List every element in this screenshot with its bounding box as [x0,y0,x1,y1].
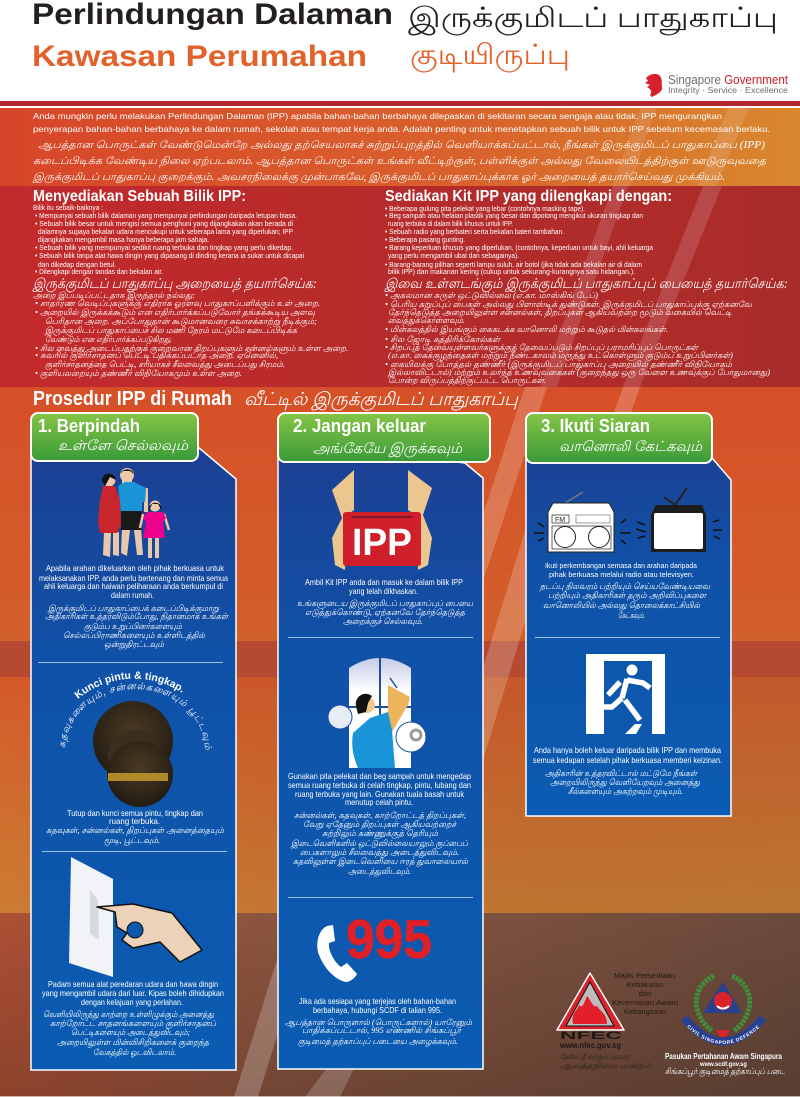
text block: step 2 call: குடிமைத் தற்காப்புப் படையை அழைக்கவும். [298,1037,458,1047]
number 995: 995 [346,908,432,970]
text block: step 1 ventilation [42,979,224,1058]
text block: step 2 call: berbahaya, hubungi SCDF di talian 995. [313,1005,442,1015]
step 2 header tab: 2. Jangan keluar [293,416,426,436]
logo: NFEC [557,973,651,1071]
text block: SCDF name: சிங்கப்பூர் குடிமைத் தற்காப்புப் படை [665,1067,785,1077]
text block: kit list tamil: • மின்கலத்தில் இயங்கும் கைகடக்க வானொலி மற்றும் கூடுதல் மின்கலங்கள். [385,325,668,335]
text block: step 2 call [285,996,472,1047]
text block: room list malay: dan dikedap dengan betul. [38,260,116,269]
text block: room list malay: • Sebuah bilik tanpa alat hawa dingin yang dipasang di dinding kerana ia sukar untuk dicapai [35,251,304,260]
intro text block: ஆபத்தான பொருட்கள் வேண்டுமென்றே அல்லது தற்செயலாகச் சுற்றுப்புறத்தில் வெளியாக்கப்பட்டால், நீங்கள் இருக்குமிடப் பாதுகாப்பை (IPP) [38,139,766,152]
title: குடியிருப்பு [410,40,570,73]
text block: kit list malay: • Barang-barang pilihan seperti lampu suluh, air botol (jika tidak ada bekalan air di dalam [385,260,642,269]
icon: family [98,468,169,558]
icon: IPP kit [332,470,432,570]
text block: step 2 seal: சுற்றிலும் கண்ணுக்குத் தெரியும் [322,829,438,839]
step 2 header tab [278,413,490,462]
text block: kit list tamil: வைத்துக்கொள்ளவும். [388,316,465,326]
text block: step 2 call: ஆபத்தான பொருளால் (பொருட்களால்) யாரேனும் [285,1018,472,1028]
icon: hand pressing switch [69,857,202,977]
text block: step 1 ventilation: dengan kelajuan yang perlahan. [81,997,183,1007]
text block: step 2 seal: semua ruang terbuka di celah tingkap, pintu, lubang dan [288,780,471,790]
step 3 header tab [526,413,712,463]
step 1 header tab: 1. Berpindah [38,416,140,436]
title [32,0,778,73]
intro text block: இருக்குமிடப் பாதுகாப்பு குறைக்கும். அவசரநிலைக்கு முன்பாகவே, இருக்குமிடப் பாதுகாப்புக்காக ஓர் அறையைத் தயார்செய்வது முக்கியம். [32,172,725,184]
text block: step 1 lock: மூடி, பூட்டவும். [104,836,160,846]
text block: room list tamil [33,291,348,379]
intro text block: penyerapan bahan-bahan berbahaya ke dalam rumah, sekolah atau tempat kerja anda. Adalah penting untuk menetapkan sebuah bilik untuk IPP sebelum kecemasan berlaku. [33,124,770,134]
text block: NFEC name: Majlis Persediaan [614,971,675,980]
text block: step 2 call: Jika ada sesiapa yang terjejas oleh bahan-bahan [299,996,456,1006]
logo: NFEC: NFEC [560,1030,622,1042]
text block: step 2 seal: சன்னல்கள், கதவுகள், காற்றோட்டத் திறப்புகள், [294,811,466,821]
text block: step 3 exit: அறையிலிருந்து வெளியேறவும் அனைத்து [550,778,701,788]
text block: kit list malay: • Sebuah radio yang berbateri serta bekalan bateri tambahan. [385,227,564,236]
text block: step 1 ventilation: yang mengambil udara dari luar. Kipas boleh dihidupkan [42,988,224,998]
text block: step 1 ventilation: வெளியிலிருந்து காற்றை உள்ளிழுக்கும் அனைத்து [43,1010,215,1020]
text block: step 1 move indoors [39,563,229,650]
text block: kit list malay: • Beg sampah atau helaian plastik yang besar dan dipotong mengikut ukuran tingkap dan [385,211,643,220]
text block: step 3 follow: வானொலியில் அல்லது தொலைக்காட்சியில் [543,601,701,611]
logo: SCDF: CIVIL SINGAPORE DEFENCE [688,1025,760,1044]
heading: procedure: Prosedur IPP di Rumah [33,388,232,410]
step 3 header tab: 3. Ikuti Siaran [541,416,650,436]
text block: step 1 move indoors: Apabila arahan dikeluarkan oleh pihak berkuasa untuk [46,563,225,573]
text block: kit list tamil: • பெரிய கறுப்புப் பைகள் அல்லது பிளாஸ்டிக் துண்டுகள். இருக்குமிடப் பாதுகாப்புக்கு ஏற்கனவே [385,300,753,310]
text block: step 3 follow: Ikuti perkembangan semasa dan arahan daripada [545,561,698,570]
text block: kit list tamil: இல்லாவிட்டால்) மற்றும் உலர்ந்த உணவுவகைகள் (குறைந்தது ஒரு வேளை உணவுக்குப் போதுமானது) [387,368,770,378]
text block: NFEC name: dan [639,989,651,998]
step 1 header tab: உள்ளே செல்லவும் [58,438,189,454]
text block: step 1 lock: ruang terbuka. [109,816,160,826]
Singapore Government logo: Integrity · Service · Excellence [668,86,789,95]
text block: room list malay: • Sebuah bilik yang mempunyai sedikit ruang terbuka dan tingkap yang perlu dikedap. [35,243,293,252]
heading: room tamil: இருக்குமிடப் பாதுகாப்பு அறையைத் தயார்செய்க: [32,276,317,293]
Singapore Government logo [645,73,789,97]
text block: kit list tamil: • சில ஜோடி கத்திரிக்கோல்கள் [385,335,502,345]
text block: step 2 call: பாதிக்கப்பட்டால், 995 எண்ணில் சிங்கப்பூர் [302,1026,463,1036]
father [118,468,148,556]
text block: room list tamil: இருக்குமிடப் பாதுகாப்பைச் சில மணி நேரம் மட்டுமே கடைப்பிடிக்க [44,326,298,336]
intro text block: Anda mungkin perlu melakukan Perlindungan Dalaman (IPP) apabila bahan-bahan berbahaya dilepaskan di sekitaran secara sengaja atau tidak. IPP mengurangkan [33,111,722,121]
heading: kit: Sediakan Kit IPP yang dilengkapi dengan: [385,188,672,205]
text block: kit list tamil: • கையிலக்கு போத்தல் தண்ணீர் (இருக்குமிடப் பாதுகாப்பு அறையில் தண்ணீர் விநியோகம் [385,360,732,370]
icon: radio: FM [555,517,565,524]
text block: step 3 exit: semua kedapan setelah pihak berkuasa memberi keizinan. [533,755,722,765]
text block: room list malay [33,203,304,276]
text block: NFEC name [612,971,678,1016]
text block: room list tamil: • அறையில் இருக்கக்கூடும் என எதிர்பார்க்கப்படுவோர் தங்கக்கூடிய அளவு [35,308,316,318]
text block: step 1 move indoors: செல்லப்பிராணிகளையும் உள்ளிடத்தில் [63,631,206,641]
icon: taping window [328,656,426,768]
text block: room list malay: • Mempunyai sebuah bilik dalaman yang mempunyai perlindungan daripada letupan biasa. [35,211,297,220]
text block: step 1 move indoors: ஒன்றுதிரட்டவும் [104,640,164,650]
text block: room list tamil: • குளியலறையும் தண்ணீர் விநியோகமும் உள்ள அறை. [35,369,242,379]
text block: kit list tamil: • அகலமான சுருள் ஒட்டுவில்லை (எ.கா. மாஸ்கிங் டேப்) [385,291,598,301]
text block: kit list malay [385,204,654,276]
text block: step 3 follow: பற்றியும் அதிகாரிகள் தரும் அறிவிப்புகளை [548,591,707,601]
mother [98,473,121,557]
text block: room list tamil: வேண்டும் என எதிர்பார்க்கப்படுகிறது. [45,335,172,345]
text block: kit list malay: ruang terbuka di dalam bilik khusus untuk IPP. [388,219,513,228]
text block: step 1 ventilation: பெட்டிகளையும் அடைத்துவிடவும்; [71,1028,190,1038]
text block: step 3 follow: கேட்கவும். [618,611,645,620]
text block: step 3 follow: pihak berkuasa melalui radio atau televisyen. [549,570,694,579]
text block: kit list tamil: தேர்ந்தெடுத்த அறையிலுள்ள சன்னல்கள், திறப்புகள் ஆகியவற்றை மூடும் வகையில் வெட்டி [388,308,732,318]
icon: telephone [317,925,357,982]
text block: step 1 move indoors: அதிகாரிகள் உத்தரவிடும்போது, நிதானமாக உங்கள் [45,612,229,622]
text block: step 2 seal [288,771,471,877]
intro text block: கடைப்பிடிக்க வேண்டிய நிலை ஏற்படலாம். ஆபத்தான பொருட்கள் உங்கள் வீட்டிற்குள், பள்ளிக்குள் அல்லது வேலையிடத்திற்குள் ஊடுருவுவதை [33,155,767,168]
text block: step 2 kit: அறைக்குச் செல்லவும். [343,617,423,627]
text block: kit list tamil: (எ.கா. கைக்குழந்தைகள் மற்றும் நீண்டகாலம் மருந்து உட்கொள்ளும் குடும்ப உறுப்பினர்கள்) [388,351,733,361]
panel: step 3 [526,413,731,816]
text block: step 2 seal: பைகளாலும் சீலவைத்து அடைத்துவிடவும். [300,848,459,858]
heading: procedure [33,388,519,411]
heading: kit tamil: இவை உள்ளடங்கும் இருக்குமிடப் பாதுகாப்புப் பையைத் தயார்செய்க: [384,276,788,293]
text block: step 1 move indoors: இருக்குமிடப் பாதுகாப்பைக் கடைப்பிடிக்குமாறு [47,604,220,614]
text block: step 1 move indoors: dalam rumah. [111,590,154,600]
panel: preparation [0,186,800,387]
text block: room list malay: • Sebuah bilik besar untuk mengisi semua penghuni yang dijangkakan akan berada di [35,219,293,228]
text block: step 1 ventilation: வேகத்தில் ஓடவிடலாம். [93,1048,176,1058]
intro text block [32,111,770,184]
text block: step 2 seal: Gunakan pita pelekat dan beg sampah untuk mengedap [288,771,471,781]
text block: step 2 seal: ruang terbuka yang lain. Gunakan tuala basah untuk [295,789,465,799]
text block: step 2 seal: கதவிலுள்ள இடைவெளியை ஈரத் துவாலையால் [293,857,469,867]
text block: room list tamil: குளிர்சாதனத்தை பெட்டி, சரியாகச் சீலவைத்து அடைப்பது சிரமம். [45,360,285,370]
text block: SCDF name [665,1052,785,1077]
text block: step 3 exit: சீல்களையும் அகற்றவும் முடியும். [568,787,683,797]
text block: step 3 follow: நடப்பு நிலவரம் பற்றியும் செய்யவேண்டியவை [539,582,711,592]
logo: NFEC: தேசிய தீ மற்றும் அவசர [560,1053,631,1062]
text block: step 3 exit: அதிகாரின் உத்தரவிட்டால் மட்டுமே நீங்கள் [545,769,698,779]
text block: step 2 kit: Ambil Kit IPP anda dan masuk ke dalam bilik IPP [305,577,463,587]
step 1 header tab [31,413,198,461]
text block: kit list malay: • Beberapa pasang gunting. [385,235,465,244]
title: Kawasan Perumahan [32,40,367,73]
heading: room: Menyediakan Sebuah Bilik IPP: [33,188,246,205]
logo: NFEC: ஆயத்தநிலை மன்றம் [560,1062,651,1071]
text block: room list tamil: அறை இப்படிப்பட்டதாக இருந்தால் நல்லது: [33,291,195,301]
girl [140,500,169,558]
text block: room list tamil: பெரிதான அறை. அப்போதுதான் கூடுமானவரை சுவாசக்காற்று நீடிக்கும்; [45,317,317,327]
icon: merlion [645,74,662,97]
text block: step 1 lock [46,808,224,846]
text block: step 1 ventilation: அறையிலுள்ள மின்விசிறிகளைக் குறைந்த [57,1038,210,1048]
text block: room list tamil: • சில வைத்து அடைப்பதற்குக் குறைவான திறப்புகளும் சன்னல்களும் உள்ள அறை. [35,344,348,354]
icon: television [636,488,722,552]
text block: step 2 kit [297,577,474,627]
text block: kit list malay: • Beberapa gulung pita pelekat yang lebar (contohnya masking tape). [385,204,585,213]
text block: kit list tamil: போன்ற விருப்பத்திற்குட்பட்ட பொருட்கள். [388,376,546,386]
panel: step 1 [30,412,237,1071]
text block: step 2 seal: அடைத்துவிடவும். [348,867,411,877]
text block: step 3 follow [539,561,711,620]
heading: procedure: வீட்டில் இருக்குமிடப் பாதுகாப்பு [244,389,519,411]
text block: room list tamil: • சாதாரண வெடிப்புகளுக்கு எதிராக ஓரளவு பாதுகாப்பளிக்கும் உள் அறை. [35,299,320,309]
text block: step 2 kit: yang telah dikhaskan. [349,586,418,596]
text block: step 1 move indoors: melaksanakan IPP, anda perlu bertenang dan minta semua [39,573,228,583]
text block: kit list malay: bilik IPP) dan makanan kering (cukup untuk sekurang-kurangnya satu hidangan.). [388,267,635,276]
text block: room list tamil: • சுவரில் குளிர்சாதனப் பெட்டி பதிக்கப்படாத அறை. ஏனெனில், [35,351,278,361]
panel: step 2 [278,413,490,1069]
icon: radio [534,492,631,552]
text block: step 1 lock: Tutup dan kunci semua pintu, tingkap dan [67,808,203,818]
text block: step 1 move indoors: ahli keluarga dan haiwan peliharaan anda berkumpul di [44,581,223,591]
text block: kit list malay: yang perlu mengambil ubat dan sebagainya). [388,251,519,260]
curved label: lock doors: கதவுகளையும், சன்னல்களையும் பூட்டவும் [60,682,212,750]
title: இருக்குமிடப் பாதுகாப்பு [408,3,778,36]
text block: room list malay: dalamnya supaya bekalan udara mencukupi untuk seberapa lama yang diperlukan; IPP [38,227,293,236]
text block: step 1 ventilation: காற்றோட்ட சாதனங்களையும் குளிர்சாதனப் [50,1019,217,1029]
text block: kit list malay: • Barang keperluan khusus yang diperlukan, (contohnya, keperluan untuk bayi, ahli keluarga [385,243,654,252]
text block: step 1 lock: கதவுகள், சன்னல்கள், திறப்புகள் அனைத்தையும் [46,826,224,836]
text block: step 2 seal: வேறு ஏதேனும் திறப்புகள் ஆகியவற்றைச் [303,820,457,830]
icon: door knob [93,701,173,807]
text block: NFEC name: Kebakaran [627,980,663,989]
text block: NFEC name: Kecemasan Awam [612,998,678,1007]
text block: SCDF name: www.scdf.gov.sg [699,1061,747,1068]
icon: IPP kit: IPP [352,522,412,564]
text block: kit list tamil [385,291,770,386]
text block: step 2 kit: உங்களுடைய இருக்குமிடப் பாதுகாப்புப் பையை [297,599,474,609]
text block: step 1 move indoors: குடும்ப உறுப்பினர்களையும் [84,622,182,632]
text block: room list malay: • Dilengkapi dengan tandas dan bekalan air. [35,267,163,276]
text block: NFEC name: Kebangsaan [624,1007,666,1016]
text block: step 2 kit: எடுத்துக்கொண்டு, ஏற்கனவே தேர்ந்தெடுத்த [305,608,466,618]
step 2 header tab: அங்கேயே இருக்கவும் [313,442,463,458]
icon: exit sign [586,654,665,734]
logo: SCDF [681,974,766,1046]
text block: step 2 seal: இடைவெளிகளில் ஒட்டுவில்லையாலும் குப்பைப் [290,839,469,849]
text block: step 1 ventilation: Padam semua alat peredaran udara dan hawa dingin [48,979,218,989]
Singapore Government logo: Singapore Government [668,73,788,87]
text block: room list malay: dijangkakan mengambil masa hanya beberapa jam sahaja. [38,235,209,244]
step 3 header tab: வானொலி கேட்கவும் [559,439,703,455]
logo: NFEC: www.nfec.gov.sg [559,1041,621,1050]
text block: step 2 seal: menutup celah pintu. [345,797,413,807]
text block: step 3 exit [533,745,722,797]
text block: step 3 exit: Anda hanya boleh keluar daripada bilik IPP dan membuka [534,745,721,755]
text block: kit list tamil: • சிறப்புத் தேவையுள்ளவர்களுக்குத் தேவைப்படும் சிறப்புப் பராமரிப்புப் பொருட்கள் [385,343,699,353]
curved label: lock doors: Kunci pintu & tingkap. [74,672,182,699]
text block: room list malay: Bilik itu sebaik-baiknya : [33,203,103,212]
